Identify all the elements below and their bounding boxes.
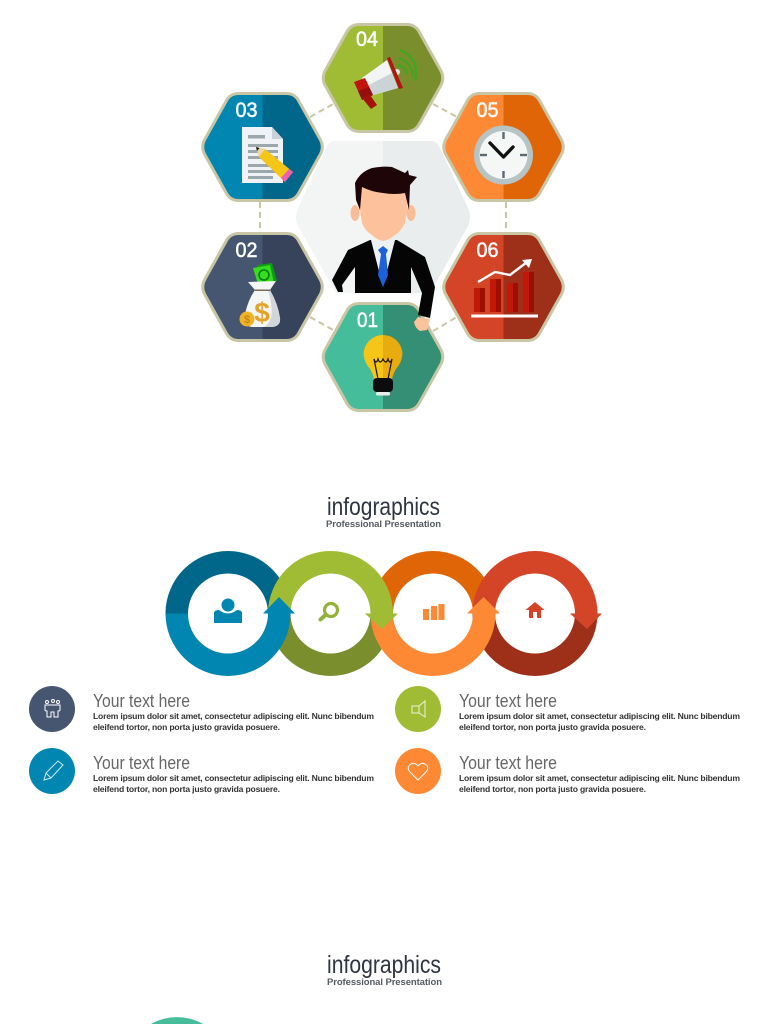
- icon: money bag: $: [244, 314, 250, 326]
- hexagon diagram: [203, 24, 563, 410]
- icon: heart outline: [408, 763, 428, 780]
- hexagon 01: [323, 304, 443, 410]
- hexagon 04: [323, 24, 443, 132]
- hair: [355, 167, 417, 210]
- ring 2 bottom: [268, 614, 393, 676]
- body text: Lorem ipsum dolor sit amet, consectetur adipiscing elit. Nunc bibendum: [459, 773, 740, 783]
- hexagon 02: [203, 234, 322, 340]
- section title 2: [327, 951, 442, 988]
- icon: house: [526, 602, 544, 618]
- body text: [93, 711, 374, 732]
- icon: bars: [423, 604, 444, 620]
- number 01: 01: [357, 309, 378, 332]
- body text: [459, 773, 740, 794]
- section title 1: infographics: [327, 493, 440, 521]
- number 05: 05: [476, 99, 498, 122]
- number 06: 06: [476, 239, 498, 262]
- icon: money bag: [240, 263, 280, 328]
- face: [358, 180, 408, 241]
- icon: person: [214, 598, 242, 623]
- subtitle 2: Professional Presentation: [327, 977, 442, 988]
- dashed connectors: [260, 103, 506, 331]
- heading: Your text here: [93, 753, 190, 773]
- ring 4 bottom: [472, 614, 598, 676]
- ring 1 top: [166, 551, 290, 614]
- heading: Your text here: [93, 691, 190, 711]
- ring 4 top with arrow: [472, 551, 602, 629]
- shirt: [371, 240, 395, 287]
- hand: [414, 317, 430, 331]
- ring 1 bottom with arrow: [166, 597, 295, 676]
- central light hexagon: [296, 141, 470, 293]
- list item: blue-grey: [29, 686, 374, 732]
- body text: eleifend tortor, non porta justo gravida posuere.: [459, 784, 646, 794]
- icon: money bag: $: [254, 297, 270, 328]
- cropped teal circle: [151, 1017, 203, 1024]
- icon: speaker outline: [412, 701, 425, 717]
- man in suit: [332, 167, 435, 331]
- ring 3 bottom with arrow: [370, 597, 500, 676]
- subtitle 1: Professional Presentation: [326, 519, 441, 530]
- hexagon 05: [444, 94, 563, 200]
- body text: [459, 711, 740, 732]
- icon: light bulb: [364, 335, 402, 396]
- body text: Lorem ipsum dolor sit amet, consectetur adipiscing elit. Nunc bibendum: [459, 711, 740, 721]
- body text: eleifend tortor, non porta justo gravida posuere.: [93, 784, 280, 794]
- section title 2: infographics: [327, 951, 441, 979]
- ring 3 top: [370, 551, 496, 614]
- hexagon 06: [444, 234, 563, 340]
- icon: document and pencil: [242, 127, 293, 183]
- body text: eleifend tortor, non porta justo gravida posuere.: [459, 722, 646, 732]
- body text: [93, 773, 374, 794]
- circular process chain: [166, 551, 602, 676]
- hexagon 03: [203, 94, 322, 200]
- list item: green: [395, 686, 740, 732]
- number 03: 03: [236, 99, 258, 122]
- heading: Your text here: [459, 691, 557, 711]
- suit: [332, 240, 435, 318]
- number 02: 02: [236, 239, 258, 262]
- icon: pencil outline: [44, 761, 63, 780]
- list item: orange: [395, 748, 740, 794]
- heading: Your text here: [459, 753, 557, 773]
- tie: [378, 246, 388, 287]
- body text: eleifend tortor, non porta justo gravida posuere.: [93, 722, 280, 732]
- list item: blue: [29, 748, 374, 794]
- ears: [350, 205, 360, 221]
- icon: shirt outline: [45, 700, 60, 717]
- icon: bar chart with rising arrow: [471, 259, 538, 318]
- section title 1: [326, 493, 441, 530]
- icon: megaphone: [354, 50, 416, 109]
- number 04: 04: [356, 28, 378, 51]
- ring 2 top with arrow: [268, 551, 398, 629]
- icon: magnifier: [320, 604, 338, 620]
- icon: clock: [474, 126, 533, 184]
- body text: Lorem ipsum dolor sit amet, consectetur adipiscing elit. Nunc bibendum: [93, 773, 374, 783]
- body text: Lorem ipsum dolor sit amet, consectetur adipiscing elit. Nunc bibendum: [93, 711, 374, 721]
